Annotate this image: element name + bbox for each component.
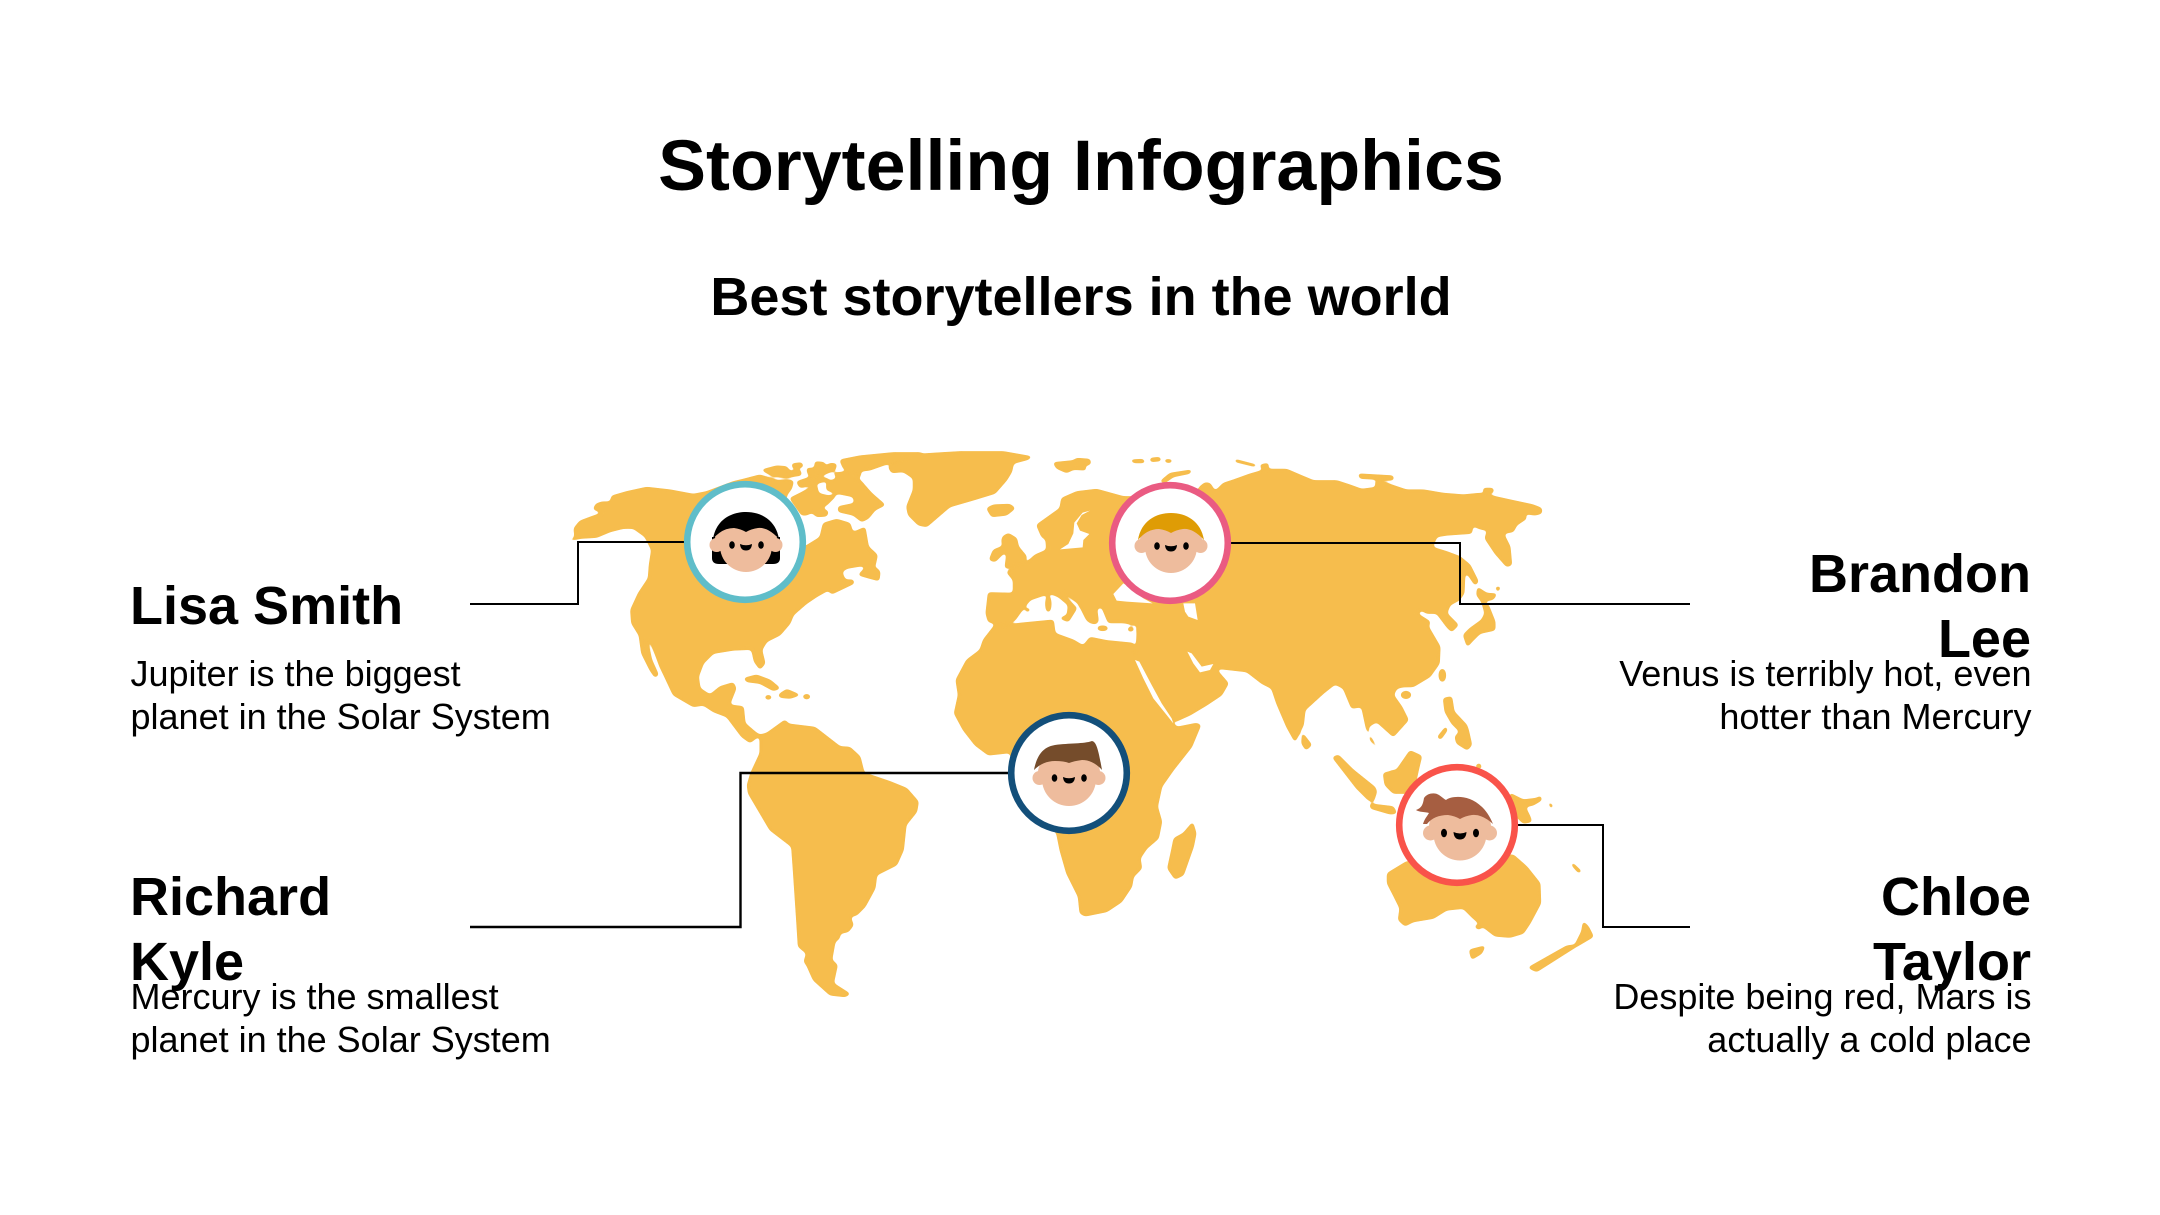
avatar: chloe taylor — [1399, 767, 1515, 883]
description: richard kyle: planet in the Solar System — [130, 1019, 551, 1060]
description: richard kyle: Mercury is the smallest — [130, 976, 499, 1017]
avatar: lisa smith — [687, 484, 803, 600]
description: richard kyle — [130, 976, 551, 1060]
connector: brandon lee — [1228, 543, 1690, 604]
name: brandon lee — [1809, 544, 2031, 668]
subtitle: Best storytellers in the world — [710, 267, 1452, 327]
avatar: richard kyle — [1011, 715, 1127, 831]
connector: chloe taylor — [1515, 825, 1690, 927]
name: richard kyle — [130, 867, 331, 992]
world map — [568, 452, 1593, 997]
north america — [568, 453, 922, 743]
description: chloe taylor — [1613, 976, 2032, 1060]
name: lisa smith: Lisa Smith — [130, 576, 403, 636]
avatar: brandon lee — [1112, 485, 1228, 601]
south-east asia and australia — [1333, 751, 1553, 959]
description: brandon lee: hotter than Mercury — [1719, 696, 2032, 737]
asia — [1180, 459, 1542, 768]
inland seas — [1060, 511, 1213, 723]
name: brandon lee: Brandon — [1809, 544, 2031, 604]
new zealand and new caledonia — [1528, 863, 1593, 972]
land masses — [568, 452, 1593, 997]
name: chloe taylor — [1873, 866, 2031, 992]
description: brandon lee: Venus is terribly hot, even — [1619, 653, 2032, 694]
name: brandon lee: Lee — [1938, 608, 2031, 668]
description: brandon lee — [1619, 653, 2032, 737]
description: lisa smith: planet in the Solar System — [130, 696, 551, 737]
name: richard kyle: Kyle — [130, 932, 244, 992]
name: richard kyle: Richard — [130, 867, 331, 927]
greenland, europe and middle east — [888, 452, 1228, 722]
name: chloe taylor: Chloe — [1881, 866, 2031, 926]
connector: lisa smith — [470, 542, 690, 604]
africa — [954, 620, 1201, 916]
title: Storytelling Infographics — [658, 126, 1504, 206]
description: chloe taylor: actually a cold place — [1707, 1019, 2032, 1060]
description: chloe taylor: Despite being red, Mars is — [1613, 976, 2032, 1017]
connector: richard kyle — [470, 773, 1012, 927]
name: chloe taylor: Taylor — [1873, 932, 2031, 992]
description: lisa smith — [130, 653, 551, 737]
south america — [747, 720, 918, 997]
description: lisa smith: Jupiter is the biggest — [130, 653, 461, 694]
